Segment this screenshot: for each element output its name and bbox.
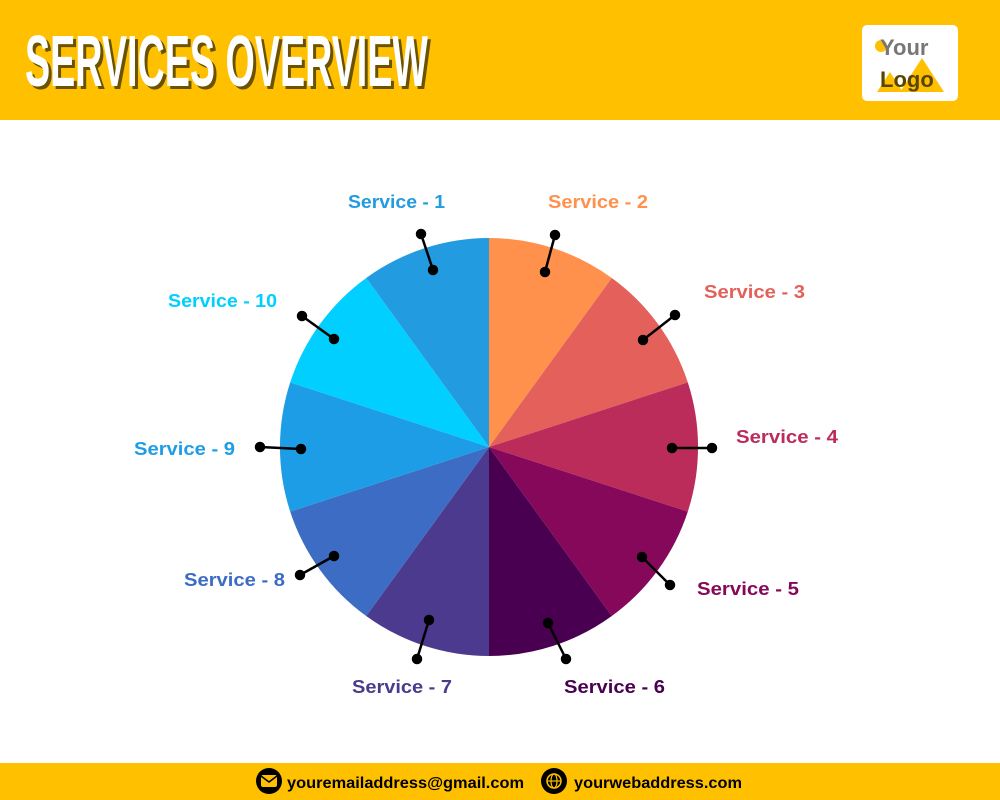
service labels: Service - 4: [736, 427, 838, 447]
logo: [862, 25, 958, 101]
header band: [0, 0, 1000, 120]
service labels: Service - 6: [564, 677, 665, 697]
service labels: Service - 5: [697, 579, 799, 599]
web text: yourwebaddress.com: [574, 775, 742, 792]
title: [25, 22, 431, 105]
footer band: [0, 763, 1000, 800]
service labels: Service - 1: [348, 192, 445, 212]
email text: youremailaddress@gmail.com: [287, 775, 524, 792]
service labels: Service - 2: [548, 192, 648, 212]
pie chart: [280, 238, 698, 656]
service labels: Service - 8: [184, 570, 285, 590]
service labels: [134, 192, 838, 697]
connectors: [256, 230, 716, 663]
icon: email: [256, 768, 282, 794]
title: SERVICES OVERVIEW: [25, 22, 428, 102]
service labels: Service - 3: [704, 282, 805, 302]
title: SERVICES OVERVIEW: [28, 25, 431, 105]
service labels: Service - 7: [352, 677, 452, 697]
logo: Logo: [880, 67, 934, 92]
service labels: Service - 10: [168, 291, 277, 311]
logo: Your: [880, 35, 929, 60]
service labels: Service - 9: [134, 439, 235, 459]
icon: globe: [541, 768, 567, 794]
